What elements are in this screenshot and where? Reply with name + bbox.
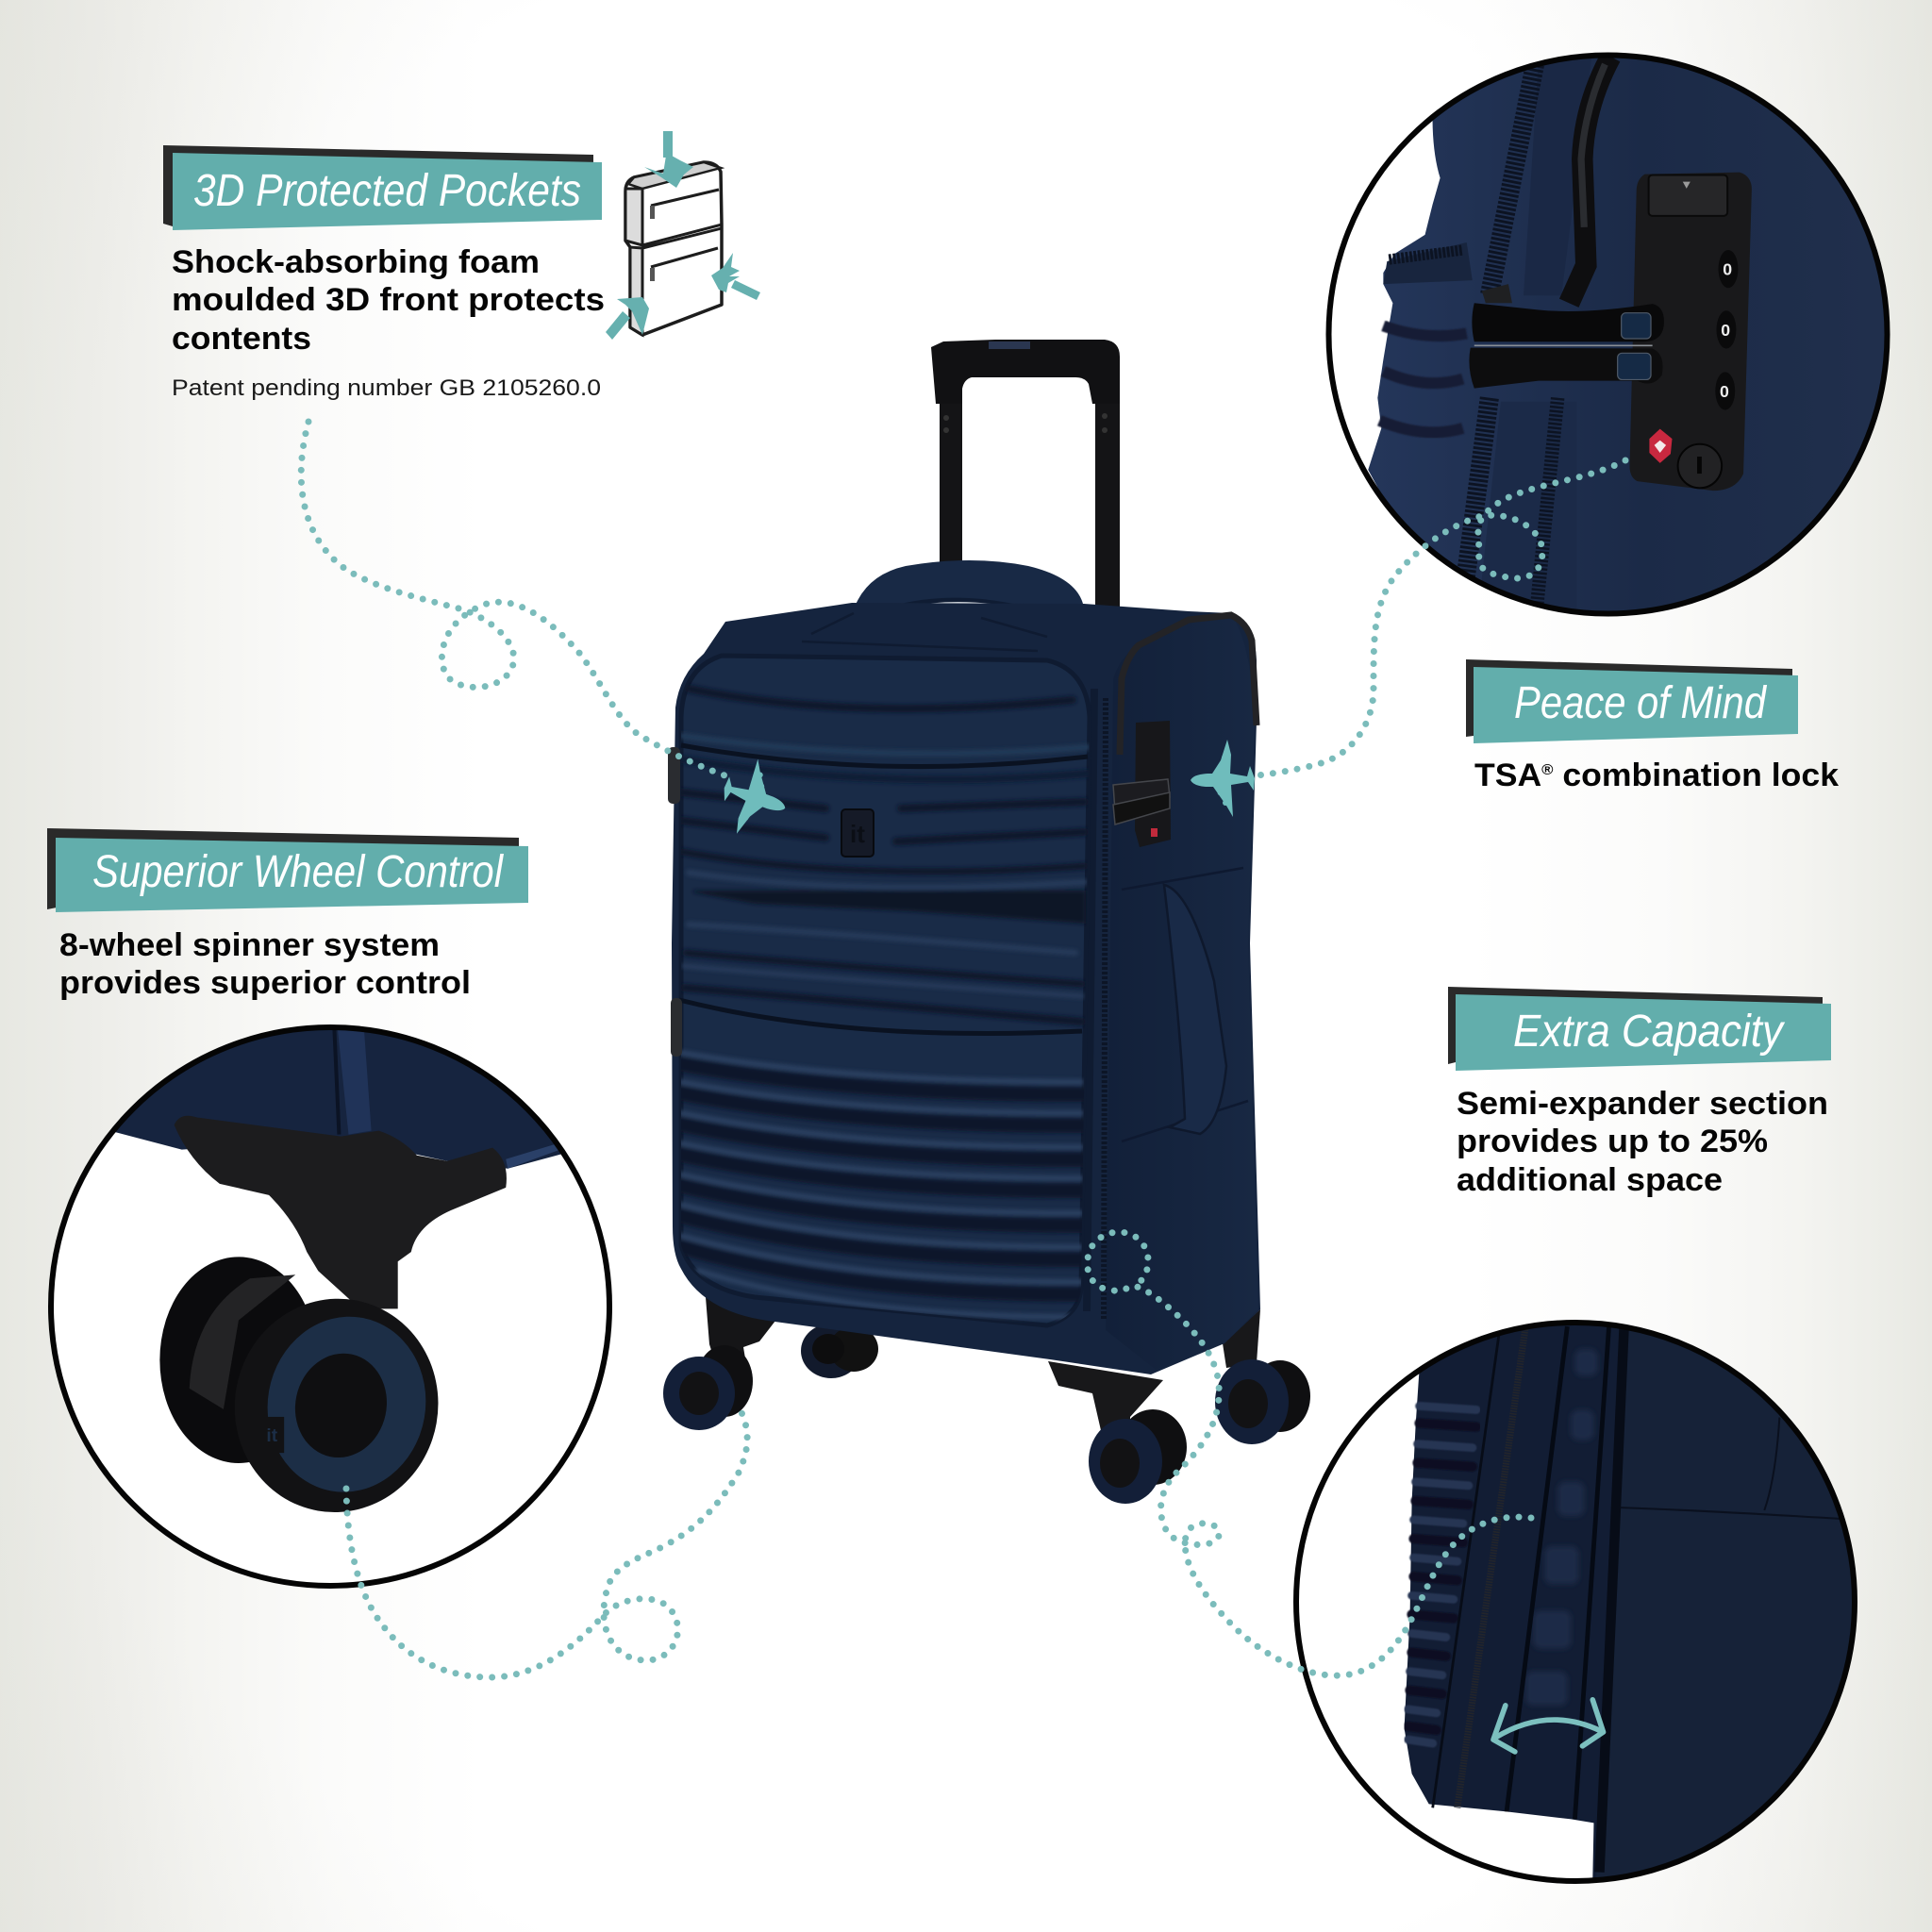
rear tyre — [159, 1257, 318, 1463]
zippers — [1463, 64, 1535, 599]
text: wheel description: 8-wheel spinner system — [59, 927, 440, 963]
front tyre — [218, 1283, 455, 1528]
banner shadow — [1448, 987, 1823, 1064]
banner shadow — [163, 145, 593, 226]
text: patent note: Patent pending number GB 2105260.0 — [172, 375, 601, 401]
middle puffs — [1525, 1349, 1597, 1706]
heading: Peace of Mind — [1514, 678, 1767, 728]
text: capacity description — [1457, 1086, 1828, 1198]
label: 3D Protected Pockets — [163, 145, 602, 230]
zippers — [1457, 1326, 1525, 1807]
logo badge: it — [850, 820, 865, 848]
text: lock description: combination lock — [1554, 758, 1839, 793]
pocket seam — [1621, 1507, 1844, 1519]
text: pockets description: contents — [172, 321, 311, 357]
lock body: 0 — [1721, 321, 1730, 340]
fabric — [115, 1030, 560, 1169]
logo badge — [841, 809, 874, 857]
text: pockets description: moulded 3D front protects — [172, 282, 605, 318]
circle detail: wheel — [51, 1009, 609, 1586]
front wheels — [663, 1345, 1310, 1504]
telescopic handle — [931, 340, 1120, 613]
icon: plane left — [711, 752, 798, 846]
wheel logo: it — [266, 1426, 278, 1446]
left scallops — [1408, 1406, 1476, 1743]
label: Peace of Mind — [1466, 659, 1798, 743]
suitcase body — [672, 603, 1260, 1374]
centre cap — [286, 1345, 396, 1466]
front panel with moulded ribs — [668, 656, 1090, 1325]
text: lock description: TSA — [1474, 758, 1539, 793]
dotted route: wheel detail to wheel — [346, 1408, 747, 1677]
banner shadow — [47, 828, 519, 909]
heading: 3D Protected Pockets — [193, 166, 581, 216]
navy hub ring — [254, 1304, 440, 1505]
lock body — [1630, 173, 1752, 491]
text: lock description: ® — [1541, 762, 1554, 778]
icon: 3D pocket diagram — [606, 131, 760, 340]
icon: compression arrows — [606, 131, 760, 340]
suitcase — [663, 340, 1310, 1504]
banner — [1456, 994, 1831, 1071]
icon: expansion arrow — [1493, 1700, 1604, 1752]
wheel legs and rear wheel — [706, 1297, 1260, 1439]
banner — [1474, 667, 1798, 743]
banner — [173, 153, 602, 230]
banner — [56, 838, 528, 912]
dotted route: expander detail to suitcase — [1088, 1232, 1531, 1675]
circle detail: expander section — [1293, 1320, 1857, 1884]
fabric — [1405, 1311, 1890, 1918]
dotted route: lock to suitcase — [1257, 460, 1625, 775]
label: Extra Capacity — [1448, 987, 1831, 1071]
lock body: 0 — [1720, 382, 1729, 401]
upper zipper — [681, 745, 1088, 767]
top trim — [1120, 615, 1257, 755]
metal zip clips — [1469, 284, 1664, 389]
text: pockets description: Shock-absorbing foam — [172, 244, 540, 280]
text: capacity description: additional space — [1457, 1162, 1723, 1198]
text: wheel description — [59, 927, 471, 1001]
banner shadow — [1466, 659, 1792, 737]
heading: Superior Wheel Control — [92, 847, 504, 897]
lower zipper — [679, 1000, 1082, 1034]
text: capacity description: Semi-expander section — [1457, 1086, 1828, 1122]
zipper pulls — [668, 747, 682, 1057]
carry handle — [849, 560, 1085, 625]
text: capacity description: provides up to 25% — [1457, 1124, 1768, 1159]
black channel — [1569, 57, 1610, 303]
text: wheel description: provides superior control — [59, 965, 471, 1001]
lock body: 0 — [1723, 260, 1732, 279]
dotted route: pockets to suitcase — [301, 422, 727, 776]
TSA lock on suitcase — [1113, 721, 1171, 847]
text: pockets description — [172, 244, 605, 357]
fabric — [1368, 58, 1885, 611]
icon: plane right — [1191, 740, 1255, 817]
circle detail: combination lock — [1326, 53, 1890, 617]
wheel logo — [261, 1417, 284, 1453]
side panel — [1087, 615, 1258, 1370]
label: Superior Wheel Control — [47, 828, 528, 912]
heading: Extra Capacity — [1513, 1007, 1786, 1057]
caster bracket — [175, 1116, 507, 1308]
top face seam — [802, 613, 1047, 651]
